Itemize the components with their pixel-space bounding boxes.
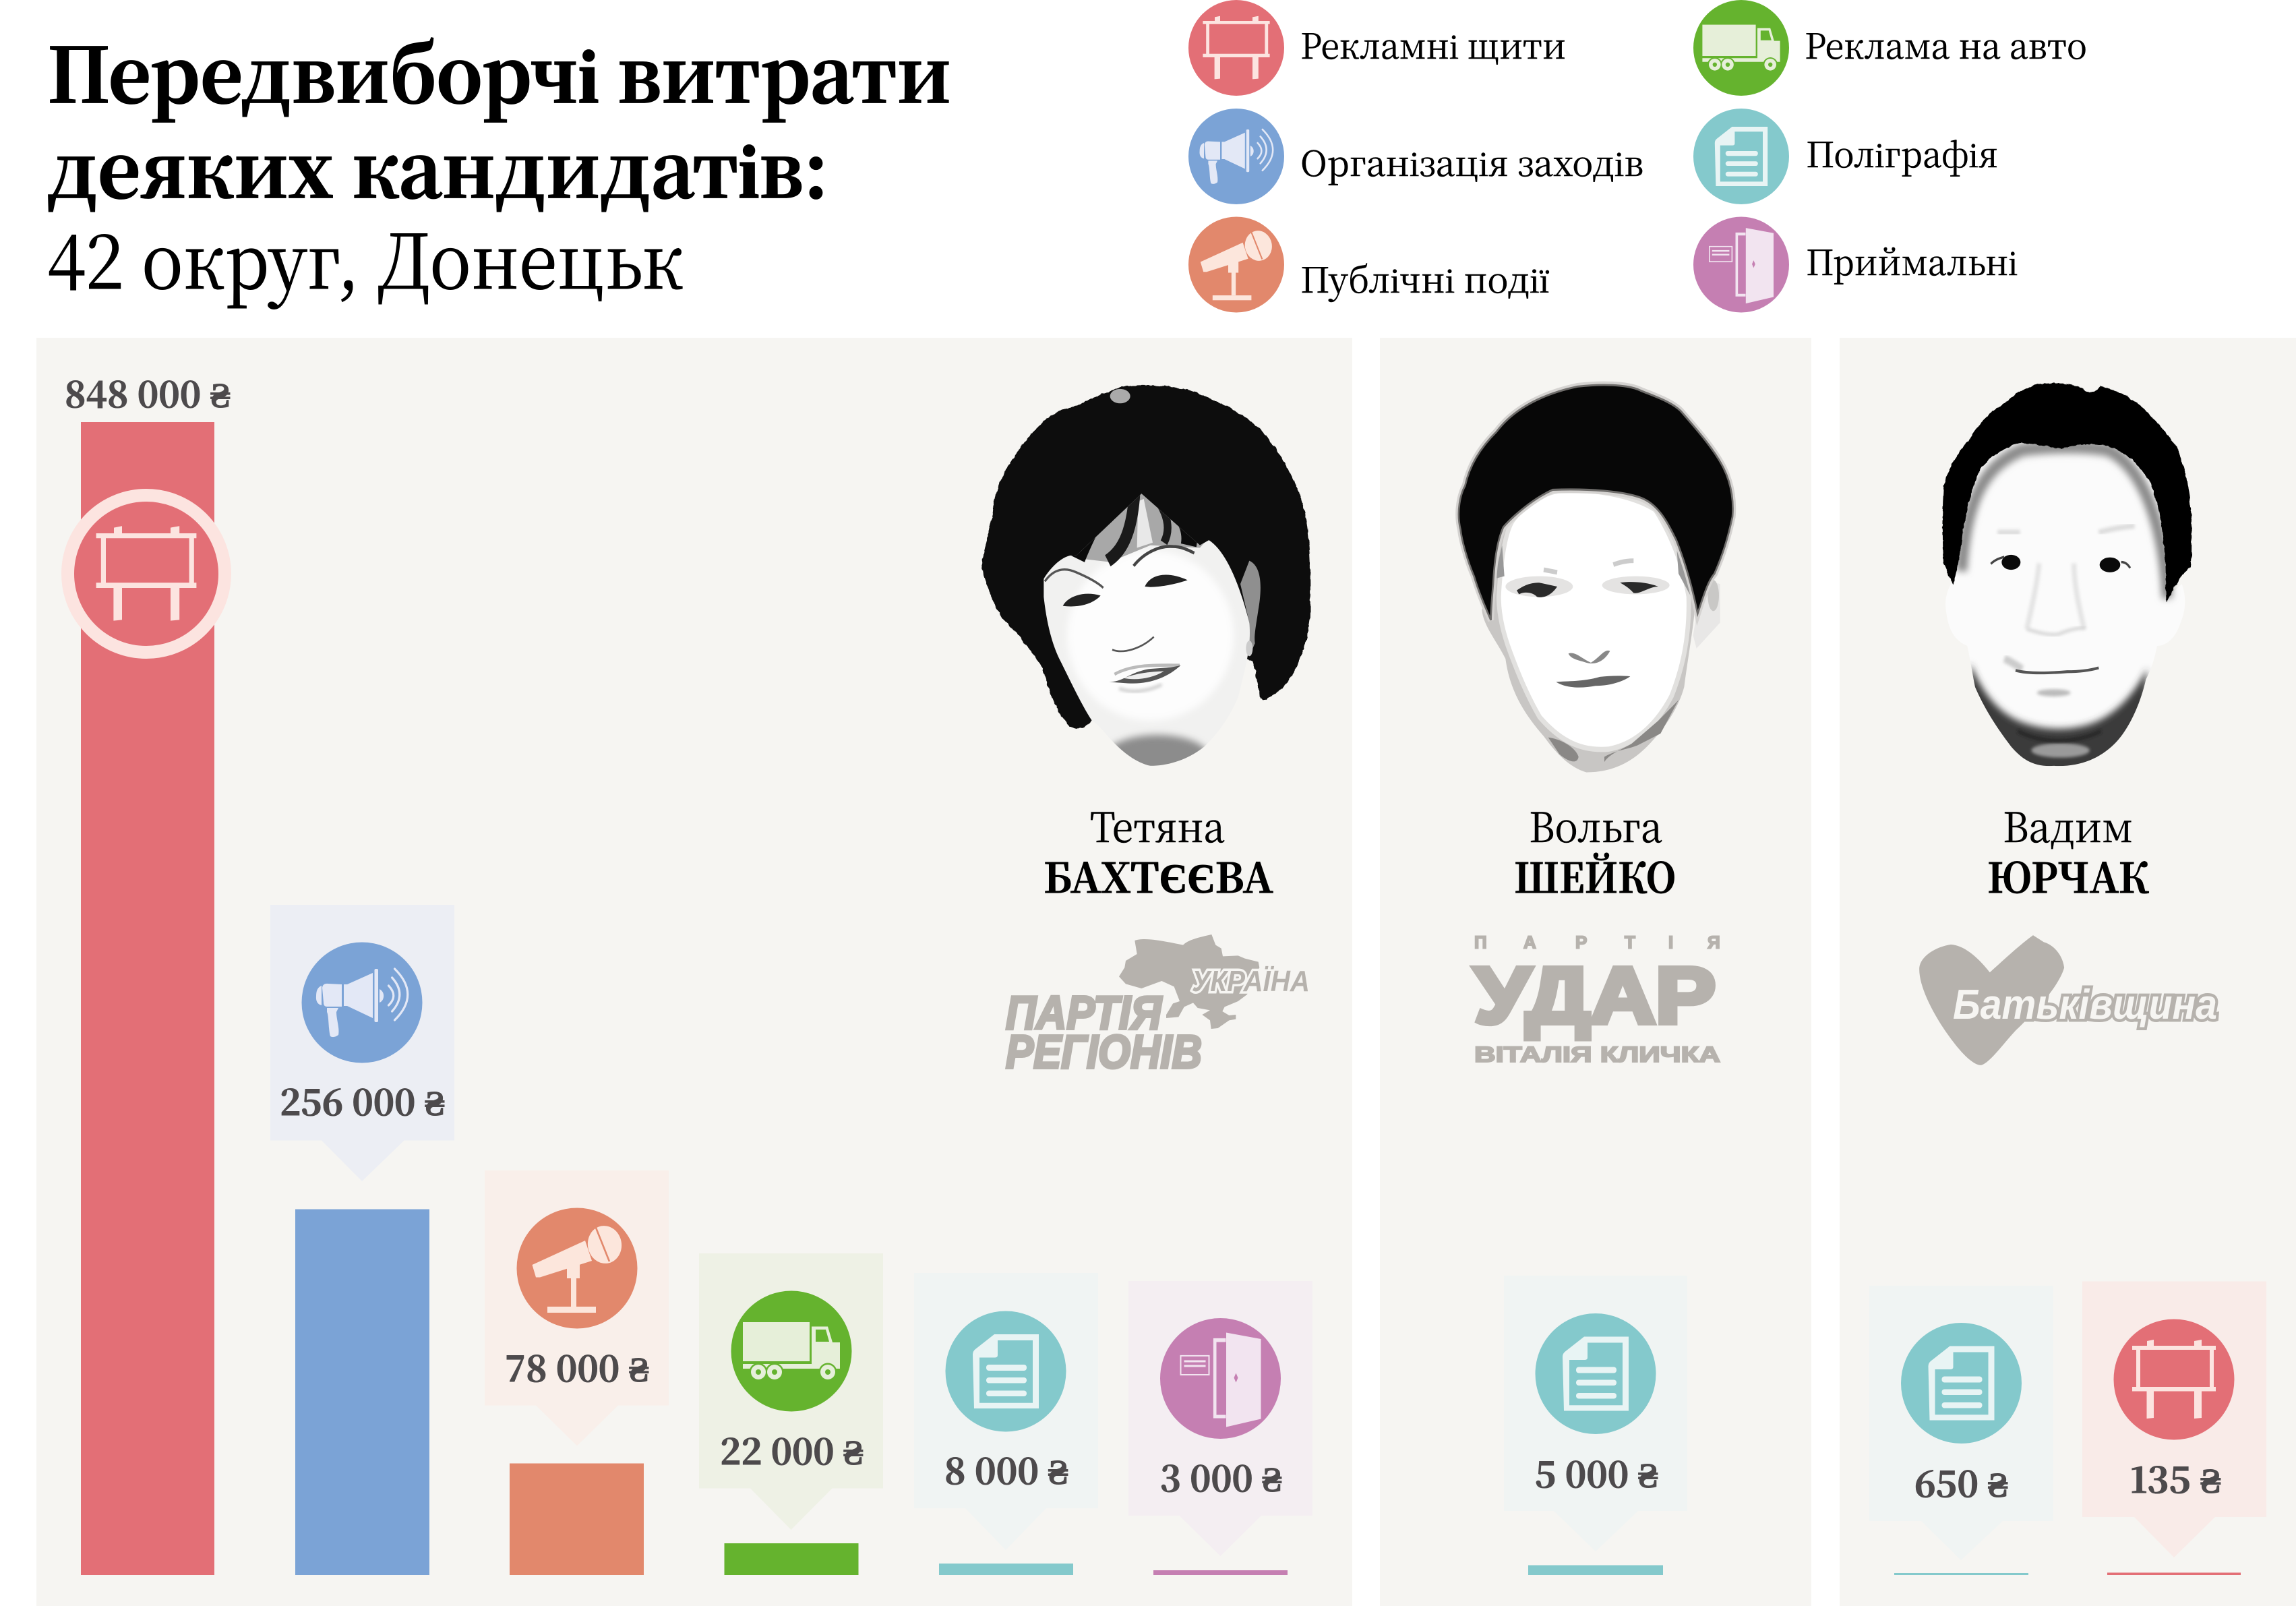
bar: vehicle ads 22 000 [699, 1253, 883, 1575]
logo: UDAR: ПАРТІЯ [1474, 932, 1720, 952]
logo: UDAR: УДАР [1474, 951, 1716, 1040]
candidate name: Olha Sheiko [1514, 796, 1676, 905]
bar: billboards 848 000: 848 000 ₴ [65, 367, 230, 417]
candidate name: Olha Sheiko: ШЕЙКО [1514, 846, 1676, 905]
legend item: reception offices [1693, 217, 2018, 313]
portrait: Olha Sheiko [1459, 385, 1733, 772]
bar: printing 650 [1869, 1286, 2053, 1575]
bar: events 256 000: 256 000 ₴ [280, 1075, 444, 1125]
candidate name: Tetiana Bakhteeva: Тетяна [1090, 796, 1225, 854]
candidate name: Tetiana Bakhteeva [1044, 796, 1273, 905]
logo: Party of Regions: УКРАЇНА [1192, 965, 1310, 998]
bar: billboards 135: 135 ₴ [2130, 1452, 2221, 1503]
panel: Bakhteeva [36, 338, 1352, 1606]
bar: vehicle ads 22 000: 22 000 ₴ [720, 1424, 863, 1475]
logo: UDAR [1474, 932, 1720, 1067]
panel: Yurchak [1840, 338, 2296, 1606]
legend item: printing: Поліграфія [1806, 127, 1998, 177]
title [47, 16, 951, 311]
logo: Party of Regions: РЕГІОНІВ [1006, 1025, 1202, 1078]
portrait: Vadym Yurchak [1943, 384, 2191, 780]
legend item: vehicle ads [1693, 0, 2087, 96]
logo: Batkivshchyna: Батьківщина [1953, 982, 2217, 1028]
legend item: billboards [1188, 0, 1566, 96]
legend item: printing [1693, 109, 1998, 204]
logo: Batkivshchyna [1919, 935, 2217, 1065]
bar: printing 650: 650 ₴ [1914, 1456, 2007, 1507]
legend item: public events: Публічні події [1300, 252, 1550, 303]
logo: UDAR: ВІТАЛІЯ КЛИЧКА [1474, 1042, 1720, 1067]
bar: events 256 000 [270, 905, 454, 1575]
bar: printing 8 000: 8 000 ₴ [944, 1444, 1068, 1494]
candidate name: Vadym Yurchak: ЮРЧАК [1987, 846, 2149, 905]
title: деяких кандидатів: [47, 111, 828, 220]
legend item: events [1188, 109, 1643, 204]
candidate name: Olha Sheiko: Вольга [1529, 796, 1662, 854]
legend item: billboards: Рекламні щити [1300, 18, 1566, 69]
portrait: Tetiana Bakhteeva [982, 385, 1310, 779]
candidate name: Vadym Yurchak [1987, 796, 2149, 905]
candidate name: Tetiana Bakhteeva: БАХТЄЄВА [1044, 846, 1273, 905]
bar: printing 8 000 [914, 1273, 1098, 1575]
bar: billboards 848 000 [65, 367, 230, 1575]
bar: reception offices 3 000 [1128, 1281, 1312, 1575]
bar: public events 78 000 [485, 1170, 669, 1575]
title: Передвиборчі витрати [47, 16, 951, 125]
legend [1188, 0, 2087, 313]
bar: reception offices 3 000: 3 000 ₴ [1160, 1451, 1281, 1501]
panel: Sheiko [1380, 338, 1811, 1606]
title: 42 округ, Донецьк [47, 202, 684, 311]
legend item: reception offices: Приймальні [1806, 235, 2018, 285]
legend item: vehicle ads: Реклама на авто [1805, 18, 2087, 69]
logo: Party of Regions [1006, 934, 1310, 1078]
bar: billboards 135 [2082, 1281, 2266, 1575]
legend item: events: Організація заходів [1300, 136, 1643, 186]
bar: printing 5 000: 5 000 ₴ [1535, 1447, 1658, 1497]
logo: Party of Regions: ПАРТІЯ [1006, 986, 1163, 1039]
legend item: public events [1188, 217, 1550, 313]
bar: printing 5 000 [1504, 1276, 1687, 1575]
candidate name: Vadym Yurchak: Вадим [2003, 796, 2133, 854]
bar: public events 78 000: 78 000 ₴ [505, 1341, 648, 1392]
